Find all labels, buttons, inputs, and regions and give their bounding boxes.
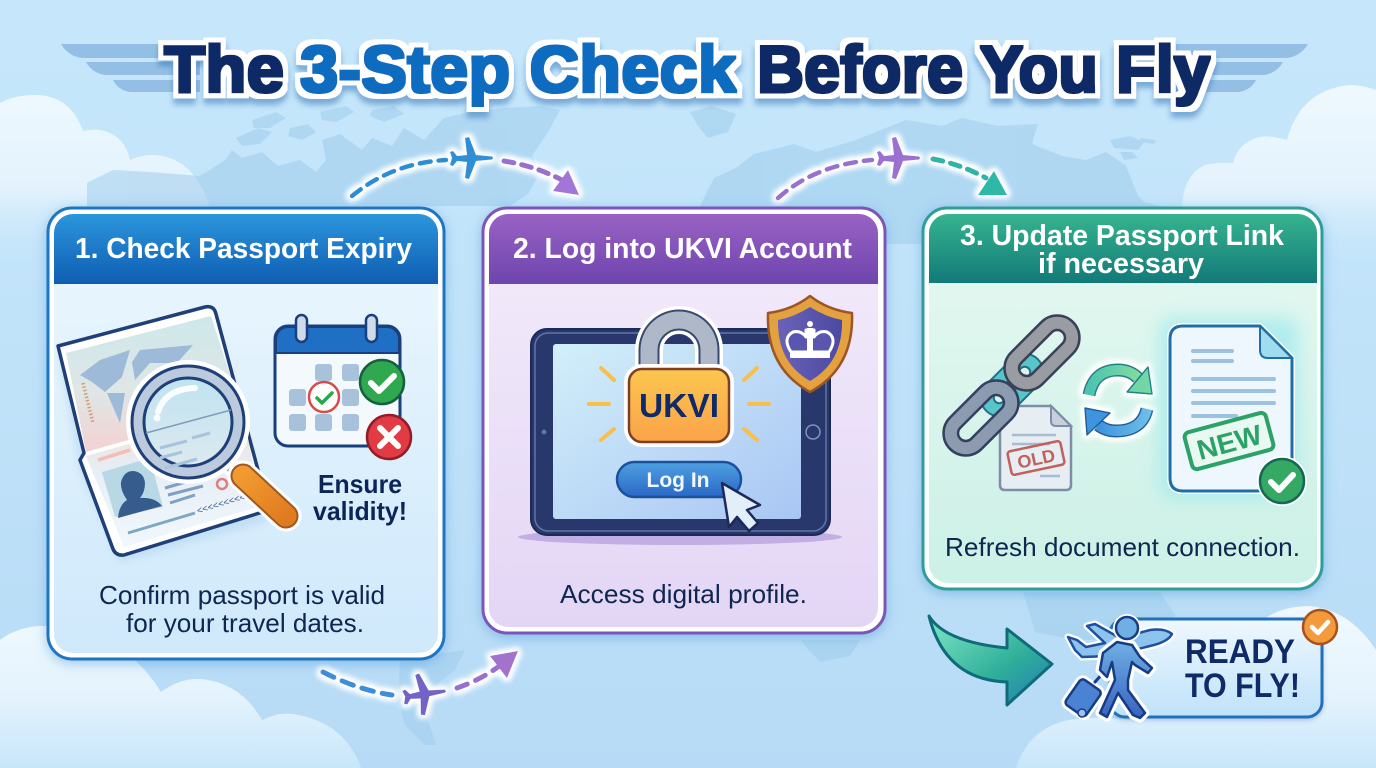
text: step 3 description: Refresh document connection. bbox=[945, 532, 1300, 562]
cloud: bottom right bbox=[1016, 606, 1376, 768]
title bbox=[164, 32, 1210, 106]
heading: step 3: 3. Update Passport Link bbox=[960, 220, 1285, 252]
flight arrow: step 2 to step 3 bbox=[778, 137, 1007, 198]
text: step 2 description: Access digital profile. bbox=[560, 579, 807, 609]
icon: orange check badge bbox=[1303, 610, 1337, 644]
card background bbox=[48, 208, 444, 659]
text: ready to fly: TO FLY! bbox=[1185, 667, 1300, 705]
icon: red cross badge bbox=[367, 415, 411, 459]
callout: ensure validity: validity! bbox=[313, 496, 407, 526]
text: step 1 description: for your travel dates. bbox=[126, 608, 364, 638]
button: log in bbox=[617, 462, 741, 497]
icon: crown shield bbox=[768, 296, 852, 392]
text: ready to fly: READY bbox=[1185, 633, 1295, 671]
cloud: top left bbox=[0, 95, 210, 260]
icon: new document bbox=[1160, 318, 1298, 498]
heading: step 3: if necessary bbox=[1038, 248, 1204, 280]
title: The bbox=[164, 32, 284, 106]
icon: passport bbox=[58, 307, 268, 562]
icon: padlock bbox=[589, 320, 769, 447]
badge card bbox=[1110, 619, 1322, 717]
flight arrow: step 1 to step 2 bbox=[352, 137, 579, 196]
card background bbox=[923, 208, 1322, 589]
text: ready to fly bbox=[1185, 633, 1300, 705]
button: log in: Log In bbox=[647, 469, 709, 492]
icon: airplane behind traveller bbox=[1068, 624, 1172, 657]
text: step 1 description: Confirm passport is valid bbox=[99, 580, 385, 610]
title: Before You Fly bbox=[757, 32, 1210, 106]
heading: step 2 bbox=[489, 214, 878, 284]
title: 3-Step Check bbox=[300, 32, 736, 106]
heading: step 1: 1. Check Passport Expiry bbox=[75, 233, 412, 265]
text: step 1 description bbox=[99, 580, 385, 638]
callout: ensure validity: Ensure bbox=[318, 469, 402, 499]
icon: calendar bbox=[275, 315, 400, 446]
world map backdrop bbox=[87, 106, 1220, 745]
icon: chain bbox=[945, 317, 1078, 454]
icon: new document: NEW bbox=[1194, 419, 1266, 466]
cloud: bottom left bbox=[0, 626, 361, 768]
icon: sync arrows bbox=[1085, 367, 1152, 435]
icon: tablet bbox=[518, 329, 842, 545]
wings behind title bbox=[61, 44, 1308, 92]
cloud: top right bbox=[1182, 85, 1376, 260]
icon: old document: OLD bbox=[1016, 445, 1057, 473]
icon: green check badge bbox=[360, 360, 404, 404]
heading: step 1 bbox=[54, 214, 438, 284]
arrow: to ready to fly bbox=[929, 616, 1052, 705]
icon: traveller with suitcase bbox=[1064, 614, 1152, 718]
icon: passport: <<<<<<<<< bbox=[196, 492, 247, 517]
panel: step 2 bbox=[483, 208, 885, 633]
panel: step 1 bbox=[48, 208, 444, 659]
callout: ready to fly bbox=[1064, 610, 1337, 718]
icon: old document bbox=[1000, 406, 1071, 490]
icon: magnifying glass bbox=[126, 360, 286, 516]
icon: green check badge bbox=[1257, 456, 1307, 506]
icon: cursor bbox=[722, 483, 760, 531]
panel: step 3 bbox=[923, 208, 1322, 589]
card background bbox=[483, 208, 885, 633]
flight arrow: bottom bbox=[323, 651, 518, 718]
icon: padlock: UKVI bbox=[639, 387, 719, 424]
callout: ensure validity bbox=[313, 469, 407, 526]
heading: step 3 bbox=[929, 214, 1317, 283]
heading: step 2: 2. Log into UKVI Account bbox=[513, 233, 852, 265]
